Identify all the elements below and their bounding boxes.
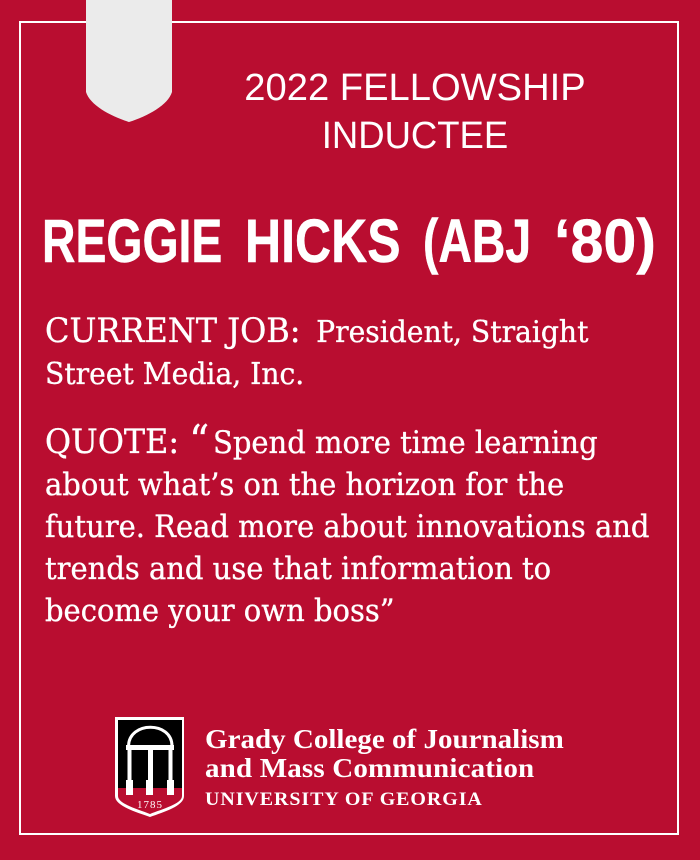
heading: fellowship: 2022 FELLOWSHIP xyxy=(244,67,586,109)
quote: trends and use that information to xyxy=(45,551,551,587)
name heading xyxy=(42,207,656,275)
current job: Street Media, Inc. xyxy=(45,357,304,392)
current job xyxy=(45,311,588,392)
quote: QUOTE: “Spend more time learning xyxy=(45,416,598,465)
name heading: (ABJ xyxy=(423,207,531,275)
current job: CURRENT JOB: President, Straight xyxy=(45,311,588,351)
logo: college name xyxy=(205,724,564,783)
name heading: HICKS xyxy=(245,207,401,275)
quote xyxy=(45,416,649,629)
logo: shield xyxy=(115,717,184,817)
quote: become your own boss” xyxy=(45,593,395,629)
logo: shield: 1785 xyxy=(137,799,163,811)
heading: fellowship xyxy=(244,67,586,157)
heading: fellowship: INDUCTEE xyxy=(322,115,508,157)
name heading: ‘80) xyxy=(554,207,656,275)
logo: university: UNIVERSITY OF GEORGIA xyxy=(205,789,483,810)
bookmark tab xyxy=(86,0,172,122)
quote: about what’s on the horizon for the xyxy=(45,467,564,503)
logo: college name: Grady College of Journalism xyxy=(205,724,564,754)
logo: college name: and Mass Communication xyxy=(205,753,534,783)
quote: future. Read more about innovations and xyxy=(45,509,649,545)
name heading: REGGIE xyxy=(42,207,222,275)
